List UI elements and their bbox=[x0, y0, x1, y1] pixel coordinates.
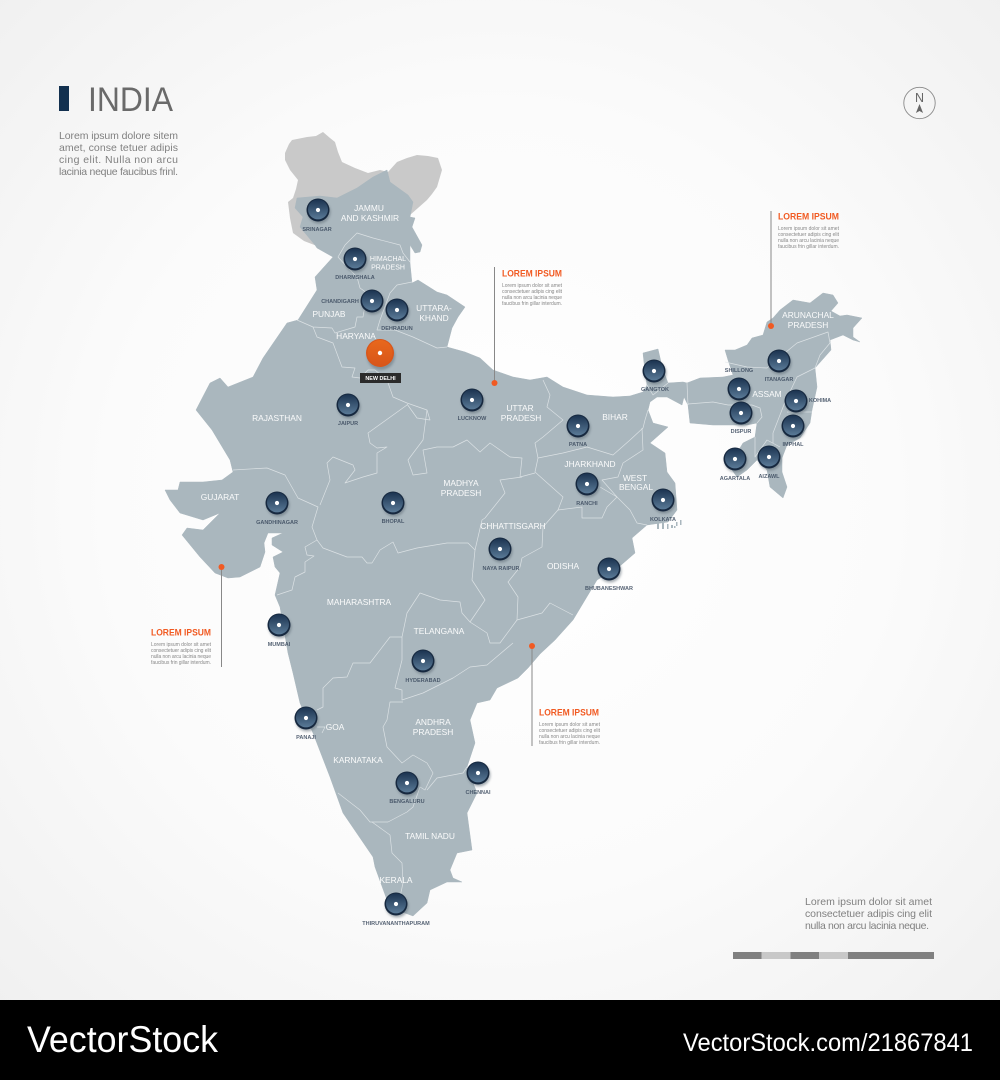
state labels: KHAND bbox=[419, 313, 449, 323]
pin: Patna bbox=[566, 414, 590, 448]
pin: Thiruvananthapuram bbox=[362, 892, 430, 927]
callout: north: Lorem ipsum dolor sit amet bbox=[502, 283, 563, 289]
pin: Thiruvananthapuram: THIRUVANANTHAPURAM bbox=[362, 921, 430, 927]
pin: Hyderabad: HYDERABAD bbox=[405, 678, 441, 684]
state labels: PRADESH bbox=[413, 727, 453, 737]
state labels: MAHARASHTRA bbox=[327, 597, 392, 607]
state labels: PUNJAB bbox=[312, 309, 346, 319]
callout: north bbox=[492, 267, 563, 386]
pin: Ranchi: RANCHI bbox=[576, 501, 598, 507]
icon: north compass: N bbox=[915, 91, 924, 105]
bottom-right text: Lorem ipsum dolor sit amet bbox=[805, 896, 932, 908]
state labels: UTTAR bbox=[506, 403, 534, 413]
state labels: PRADESH bbox=[371, 264, 405, 272]
title accent bar bbox=[59, 86, 69, 111]
pin: Lucknow bbox=[458, 388, 487, 422]
pin: Naya Raipur: NAYA RAIPUR bbox=[483, 566, 520, 572]
disputed territory bbox=[285, 132, 442, 246]
bottom-right text bbox=[805, 896, 932, 932]
pin: Dispur: DISPUR bbox=[731, 429, 751, 435]
pin: Lucknow: LUCKNOW bbox=[458, 416, 487, 422]
pin: Kolkata: KOLKATA bbox=[650, 517, 676, 523]
pin: Itanagar bbox=[765, 350, 793, 383]
pin: Bengaluru: BENGALURU bbox=[389, 799, 425, 805]
pin: Shillong: SHILLONG bbox=[725, 368, 753, 374]
pin: Bhubaneshwar: BHUBANESHWAR bbox=[585, 586, 633, 592]
callout: south east: consectetuer adipis cing elit bbox=[539, 728, 601, 734]
pin: Dehradun bbox=[381, 298, 413, 332]
callout: north east: consectetuer adipis cing elit bbox=[778, 232, 840, 238]
pin: Panaji: PANAJI bbox=[296, 735, 316, 741]
footer watermark bar: VectorStock bbox=[27, 1018, 218, 1060]
state labels: ARUNACHAL bbox=[782, 310, 834, 320]
state labels: GOA bbox=[326, 722, 345, 732]
intro text bbox=[59, 130, 178, 178]
state labels: KERALA bbox=[379, 875, 413, 885]
pin: Bengaluru bbox=[389, 772, 425, 805]
callout: west bbox=[151, 564, 224, 667]
callout: north: nulla non arcu lacinia neque bbox=[502, 295, 562, 301]
pin: New Delhi bbox=[360, 339, 401, 383]
pin: Ranchi bbox=[576, 472, 600, 507]
pin: Panaji bbox=[294, 706, 318, 741]
title block bbox=[59, 81, 173, 119]
bottom-right text: nulla non arcu lacinia neque. bbox=[805, 920, 929, 932]
pin: Jaipur: JAIPUR bbox=[338, 421, 358, 427]
pin: Hyderabad bbox=[405, 650, 441, 684]
intro text: cing elit. Nulla non arcu bbox=[59, 154, 178, 166]
pin: Dharmshala: DHARMSHALA bbox=[335, 275, 375, 281]
pin: Gandhinagar: GANDHINAGAR bbox=[256, 520, 298, 526]
footer watermark bar: VectorStock.com/21867841 bbox=[683, 1029, 973, 1057]
intro text: amet, conse tetuer adipis bbox=[59, 142, 178, 154]
callout: south east: Lorem ipsum dolor sit amet bbox=[539, 722, 601, 728]
pin: Aizawl: AIZAWL bbox=[758, 474, 780, 480]
scale bar bbox=[733, 952, 934, 959]
callout: north east: nulla non arcu lacinia neque bbox=[778, 238, 839, 244]
state labels: MADHYA bbox=[443, 478, 479, 488]
state labels: KARNATAKA bbox=[333, 755, 383, 765]
pin: Dispur bbox=[730, 402, 754, 435]
callout: north: LOREM IPSUM bbox=[502, 268, 562, 278]
callout: north east: LOREM IPSUM bbox=[778, 212, 839, 222]
pin: Gandhinagar bbox=[256, 492, 298, 526]
pin: Srinagar bbox=[302, 198, 332, 233]
bottom-right text: consectetuer adipis cing elit bbox=[805, 908, 932, 920]
callout: north: consectetuer adipis cing elit bbox=[502, 289, 563, 295]
pin: Imphal bbox=[782, 414, 806, 448]
pin: Gangtok: GANGTOK bbox=[641, 387, 669, 393]
pin: New Delhi: NEW DELHI bbox=[365, 376, 396, 382]
state boundaries bbox=[233, 233, 830, 897]
state labels: RAJASTHAN bbox=[252, 413, 302, 423]
pin: Aizawl bbox=[758, 446, 782, 480]
pin: Srinagar: SRINAGAR bbox=[302, 227, 332, 233]
state labels: JHARKHAND bbox=[564, 459, 616, 469]
state labels: WEST bbox=[623, 473, 647, 483]
state labels: JAMMU bbox=[354, 203, 384, 213]
pin: Itanagar: ITANAGAR bbox=[765, 377, 793, 383]
map of India bbox=[165, 132, 862, 916]
pin: Mumbai bbox=[268, 614, 292, 648]
pin: Shillong bbox=[725, 368, 753, 402]
pin: Bhubaneshwar bbox=[585, 558, 633, 592]
Sundarbans islands bbox=[657, 520, 682, 529]
pin: Patna: PATNA bbox=[569, 442, 587, 448]
callout: south east: faucibus frin gillar interdum. bbox=[539, 740, 600, 746]
state labels: GUJARAT bbox=[201, 492, 239, 502]
footer watermark bar bbox=[0, 1000, 1000, 1080]
pin: Agartala bbox=[720, 448, 750, 482]
state labels: HARYANA bbox=[336, 331, 376, 341]
pin: Imphal: IMPHAL bbox=[782, 442, 804, 448]
callout: west: Lorem ipsum dolor sit amet bbox=[151, 642, 212, 648]
intro text: Lorem ipsum dolore sitem bbox=[59, 130, 178, 142]
callout: south east: nulla non arcu lacinia neque bbox=[539, 734, 600, 740]
state labels: BENGAL bbox=[619, 482, 653, 492]
pin: Bhopal bbox=[382, 492, 406, 525]
India territory bbox=[165, 170, 862, 916]
pin: Jaipur bbox=[336, 394, 360, 427]
callout: west: LOREM IPSUM bbox=[151, 628, 211, 638]
state labels: AND KASHMIR bbox=[341, 213, 399, 223]
callout: west: consectetuer adipis cing elit bbox=[151, 648, 212, 654]
callout: south east bbox=[529, 643, 601, 746]
pin: Chandigarh bbox=[321, 290, 384, 314]
pin: Kohima bbox=[784, 390, 831, 414]
pin: Chennai bbox=[465, 762, 491, 796]
capital pins bbox=[256, 198, 831, 927]
state labels: CHHATTISGARH bbox=[480, 521, 546, 531]
state labels: TAMIL NADU bbox=[405, 831, 455, 841]
callout: south east: LOREM IPSUM bbox=[539, 708, 599, 718]
pin: Mumbai: MUMBAI bbox=[268, 642, 291, 648]
state labels: PRADESH bbox=[788, 320, 828, 330]
state labels: PRADESH bbox=[501, 413, 541, 423]
state labels: UTTARA- bbox=[416, 303, 452, 313]
pin: Kolkata bbox=[650, 488, 676, 523]
pin: Naya Raipur bbox=[483, 538, 520, 572]
state labels bbox=[201, 203, 834, 885]
pin: Agartala: AGARTALA bbox=[720, 476, 750, 482]
intro text: lacinia neque faucibus frinl. bbox=[59, 166, 178, 178]
state labels: ASSAM bbox=[752, 389, 782, 399]
title: INDIA bbox=[88, 81, 173, 119]
icon: north compass bbox=[904, 87, 935, 119]
callout: north: faucibus frin gillar interdum. bbox=[502, 301, 562, 307]
pin: Bhopal: BHOPAL bbox=[382, 519, 405, 525]
callout: north east bbox=[768, 211, 840, 329]
callout: west: nulla non arcu lacinia neque bbox=[151, 654, 211, 660]
pin: Kohima: KOHIMA bbox=[809, 398, 831, 404]
callout: west: faucibus frin gillar interdum. bbox=[151, 660, 211, 666]
state labels: ODISHA bbox=[547, 561, 579, 571]
pin: Dharmshala bbox=[335, 248, 375, 281]
state labels: PRADESH bbox=[441, 488, 481, 498]
callout: north east: Lorem ipsum dolor sit amet bbox=[778, 226, 840, 232]
callout: north east: faucibus frin gillar interdum. bbox=[778, 244, 839, 250]
state labels: BIHAR bbox=[602, 412, 628, 422]
state labels: TELANGANA bbox=[414, 626, 465, 636]
state labels: HIMACHAL bbox=[370, 256, 406, 263]
state labels: ANDHRA bbox=[415, 717, 451, 727]
pin: Chandigarh: CHANDIGARH bbox=[321, 299, 359, 305]
pin: Gangtok bbox=[641, 360, 669, 393]
pin: Chennai: CHENNAI bbox=[465, 790, 491, 796]
pin: Dehradun: DEHRADUN bbox=[381, 326, 413, 332]
